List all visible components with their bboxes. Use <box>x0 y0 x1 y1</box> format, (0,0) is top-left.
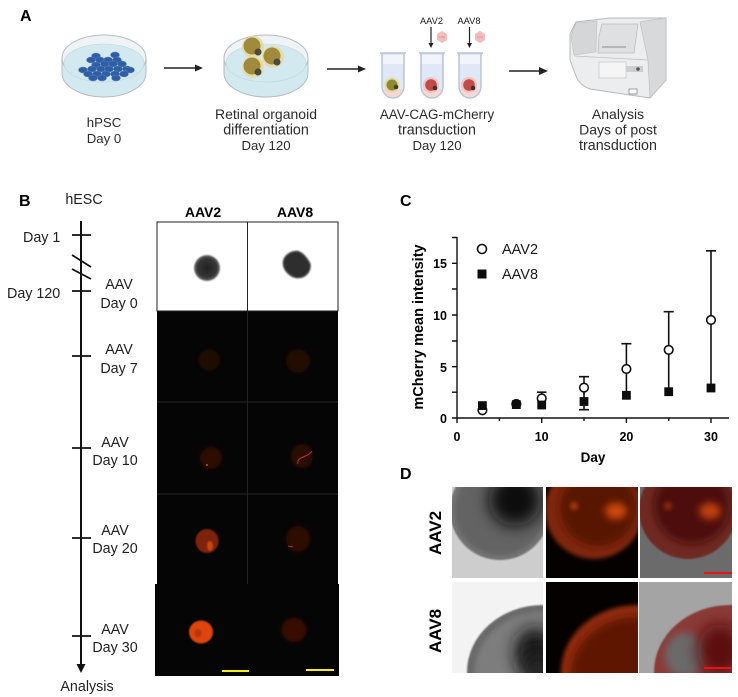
tube: AAV2 <box>419 53 445 98</box>
label Analysis: Analysis <box>60 679 114 695</box>
label AAV Day 30: AAV <box>101 622 129 638</box>
AAV2 addition: AAV2 <box>420 16 443 26</box>
text: retinal organoid differentiation: Retinal organoid <box>215 106 317 122</box>
y-axis tick labels: 0 <box>440 412 447 426</box>
legend: AAV2 <box>502 242 538 258</box>
x-axis tick labels: 0 <box>454 430 461 444</box>
error bars <box>516 251 716 410</box>
x-axis tick labels <box>454 430 718 444</box>
tube: AAV8 <box>457 53 483 98</box>
text: analysis days of post transduction: Days of post <box>579 122 657 138</box>
label AAV Day 7: AAV <box>105 342 133 358</box>
text: hPSC Day 0: hPSC <box>87 115 121 130</box>
row label AAV8: AAV8 <box>426 609 445 653</box>
text: AAV-CAG-mCherry transduction: Day 120 <box>412 138 462 153</box>
AAV8 addition <box>457 16 485 48</box>
icon: organoid dish <box>224 35 308 97</box>
text: AAV-CAG-mCherry transduction: AAV-CAG-mCherry <box>380 107 494 122</box>
text: analysis days of post transduction: Analysis <box>592 106 644 122</box>
label C: C <box>400 193 412 210</box>
AAV8 addition: AAV8 <box>457 16 481 26</box>
label AAV Day 0: Day 0 <box>100 296 138 312</box>
y-axis title: mCherry mean intensity <box>411 244 427 410</box>
y-axis tick labels: 5 <box>440 361 447 375</box>
label AAV Day 7: Day 7 <box>100 361 138 377</box>
AAV2 brightfield tile <box>452 487 543 578</box>
arrow 3 <box>509 67 548 75</box>
label D: D <box>400 466 412 483</box>
AAV2 addition <box>420 16 447 48</box>
y-axis tick labels <box>433 257 447 426</box>
legend <box>478 242 538 283</box>
AAV8 brightfield tile <box>452 582 543 673</box>
panel D: magnified images <box>401 468 732 673</box>
text: analysis days of post transduction: transduction <box>579 138 657 154</box>
y-axis tick labels: 10 <box>433 309 447 323</box>
label B: B <box>19 193 31 210</box>
AAV8 series markers <box>478 384 715 410</box>
panel B: timeline <box>7 192 138 695</box>
chart axes <box>452 237 729 423</box>
fluorescence day 30 row <box>155 584 339 676</box>
header AAV2: AAV2 <box>185 204 221 220</box>
label AAV Day 20: AAV <box>101 523 129 539</box>
header AAV8: AAV8 <box>277 204 313 220</box>
label A: A <box>20 8 32 25</box>
text: hESC: hESC <box>65 192 103 208</box>
AAV8 fluorescence tile <box>546 582 638 673</box>
AAV8 merged tile <box>639 582 732 673</box>
label AAV Day 30: Day 30 <box>92 640 138 656</box>
label AAV Day 0: AAV <box>105 277 133 293</box>
text: retinal organoid differentiation: differentiation <box>223 122 309 138</box>
fluorescence day 20 row <box>157 494 338 584</box>
text: retinal organoid differentiation: Day 120 <box>241 138 291 153</box>
panel A: workflow <box>20 8 666 154</box>
legend: AAV8 <box>502 267 538 283</box>
x-axis title: Day <box>581 450 606 465</box>
AAV2 merged tile <box>640 487 732 578</box>
AAV2 series markers <box>478 316 715 415</box>
label Day 120: Day 120 <box>7 286 60 302</box>
x-axis tick labels: 10 <box>535 430 549 444</box>
panel B: image grid <box>155 204 339 676</box>
brightfield row <box>157 222 338 311</box>
row label AAV2: AAV2 <box>426 511 445 555</box>
text: hPSC Day 0: Day 0 <box>87 131 121 146</box>
y-axis tick labels: 15 <box>433 257 447 271</box>
fluorescence day 10 row <box>157 402 338 494</box>
AAV2 fluorescence tile <box>546 487 638 578</box>
label AAV Day 10: AAV <box>101 435 129 451</box>
icon: hPSC dish <box>62 35 146 97</box>
label AAV Day 20: Day 20 <box>92 541 138 557</box>
fluorescence day 7 row <box>157 312 338 402</box>
label Day 1: Day 1 <box>23 230 60 246</box>
x-axis tick labels: 20 <box>619 430 633 444</box>
timeline axis arrow <box>72 221 91 673</box>
tube: untreated <box>380 53 406 98</box>
panel C: scatter chart <box>400 193 729 465</box>
icon: analyzer instrument <box>570 18 666 98</box>
label AAV Day 10: Day 10 <box>92 453 138 469</box>
arrow 2 <box>327 66 366 72</box>
arrow 1 <box>164 64 203 72</box>
x-axis tick labels: 30 <box>704 430 718 444</box>
text: AAV-CAG-mCherry transduction: transduction <box>398 122 476 138</box>
